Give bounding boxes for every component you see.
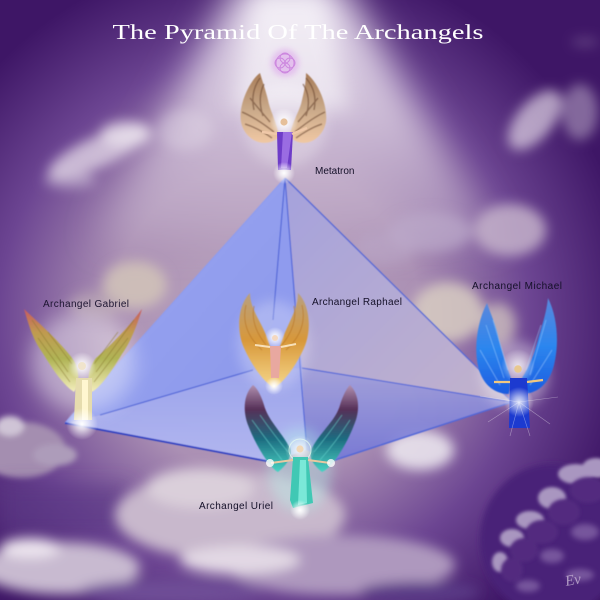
- Michael light rays: [480, 396, 558, 436]
- clouds: bottom bank: [0, 468, 480, 600]
- symbol: sacred geometry orb: [271, 49, 299, 77]
- Gabriel robe: [74, 378, 92, 420]
- clouds: left low bank: [0, 416, 77, 478]
- Michael wings: [476, 298, 557, 394]
- angel: Raphael: [238, 293, 310, 395]
- label: Archangel Raphael: Archangel Raphael: [312, 297, 402, 308]
- title: The Pyramid Of The Archangels: [112, 20, 484, 44]
- angel: Gabriel: [24, 309, 142, 440]
- artist signature: Ev: [563, 571, 583, 590]
- label: Metatron: Metatron: [315, 166, 354, 177]
- Raphael robe: [270, 346, 281, 378]
- pyramid left face: [65, 178, 285, 423]
- pyramid edges: [65, 178, 512, 462]
- angel: Uriel: [245, 385, 358, 520]
- label: Archangel Michael: Archangel Michael: [472, 281, 562, 292]
- pyramid floor left: [65, 368, 306, 462]
- label: Archangel Gabriel: Archangel Gabriel: [43, 299, 129, 310]
- label: Archangel Uriel: Archangel Uriel: [199, 501, 273, 512]
- Michael robe: [509, 378, 530, 428]
- clouds: upper and middle sky: [43, 37, 599, 470]
- angel: Michael: [476, 298, 558, 436]
- pyramid centre face: [253, 178, 302, 370]
- pyramid floor right: [302, 368, 512, 460]
- clouds: bottom-right dark cumulus: [480, 458, 600, 600]
- Metatron robe: [277, 132, 293, 170]
- Raphael wings: [239, 293, 309, 388]
- pyramid right face: [285, 178, 512, 402]
- angel: Metatron: [241, 73, 327, 184]
- pyramid: [65, 178, 512, 462]
- Metatron wings: [241, 73, 326, 143]
- Uriel robe: [290, 457, 313, 508]
- Uriel wings: [245, 385, 358, 472]
- light beam: [95, 0, 500, 240]
- Gabriel wings: [24, 309, 142, 392]
